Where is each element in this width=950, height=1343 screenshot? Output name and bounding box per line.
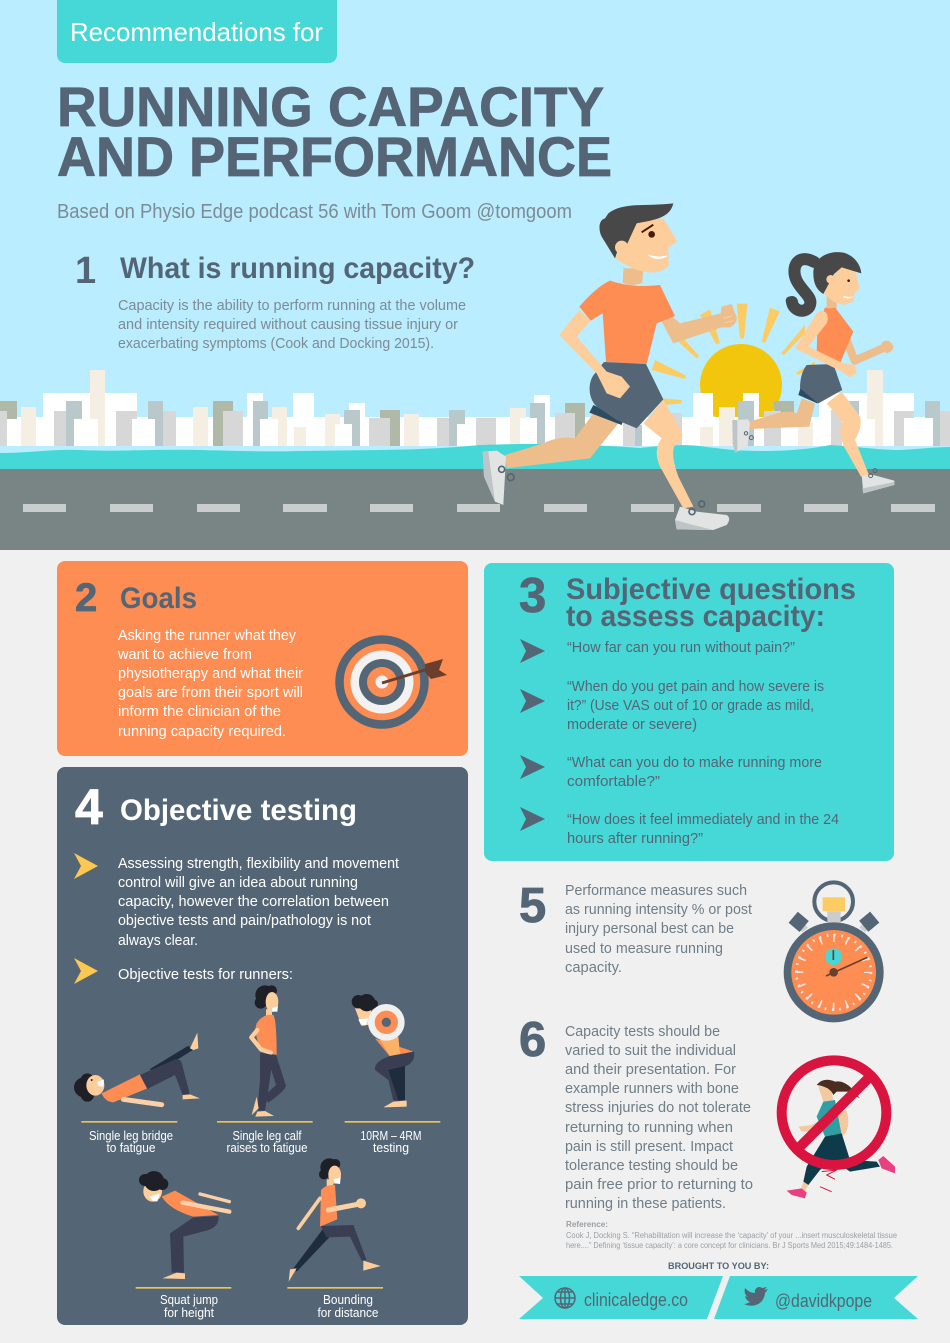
question list: “How does it feel immediately and in the 24 bbox=[567, 811, 839, 828]
figure: bounding bbox=[287, 1158, 383, 1320]
figure: 10RM to 4RM testing bbox=[345, 994, 440, 1155]
panel: hero sky background bbox=[0, 0, 950, 550]
reference: Reference: bbox=[566, 1220, 608, 1229]
panel: objective testing: 4 bbox=[75, 779, 103, 835]
section 1: what is running capacity: 1 bbox=[75, 250, 96, 292]
section 5: performance measures: capacity. bbox=[565, 959, 622, 976]
figure: 10RM to 4RM testing: 10RM – 4RM bbox=[360, 1129, 422, 1143]
title: AND PERFORMANCE bbox=[57, 125, 612, 188]
section 6: capacity tests: pain is still present. Impact bbox=[565, 1138, 734, 1155]
objective testing text bbox=[118, 855, 400, 983]
icon: bullet arrows bbox=[520, 639, 545, 831]
panel: subjective questions: to assess capacity: bbox=[566, 600, 825, 633]
panel: objective testing: Objective testing bbox=[120, 794, 357, 827]
section 5: performance measures: used to measure running bbox=[565, 940, 723, 957]
question list: it?” (Use VAS out of 10 or grade as mild, bbox=[567, 697, 814, 714]
section 5: performance measures: 5 bbox=[519, 879, 546, 933]
section 1: what is running capacity: exacerbating symptoms (Cook and Docking 2015). bbox=[118, 335, 434, 352]
figure: single leg calf raise: raises to fatigue bbox=[226, 1141, 308, 1155]
icon: stopwatch bbox=[784, 882, 884, 1022]
section 1: what is running capacity: What is running capacity? bbox=[120, 252, 475, 285]
figure: squat jump bbox=[136, 1171, 231, 1320]
section 6: capacity tests: returning to running when bbox=[565, 1119, 733, 1136]
question list: moderate or severe) bbox=[567, 716, 697, 733]
panel: subjective questions: 3 bbox=[519, 569, 546, 623]
figure: single leg calf raise: Single leg calf bbox=[232, 1129, 302, 1143]
section 6: capacity tests: and their presentation. For bbox=[565, 1061, 736, 1078]
icon: yellow chevrons bbox=[74, 853, 98, 984]
panel: goals: physiotherapy and what their bbox=[118, 665, 303, 682]
tag: recommendations for: Recommendations for bbox=[70, 17, 323, 47]
icon: globe bbox=[555, 1288, 575, 1308]
question list bbox=[567, 639, 839, 847]
section 6: capacity tests: example runners with bone bbox=[565, 1080, 739, 1097]
water band bbox=[0, 444, 950, 470]
icon: male runner bbox=[483, 203, 737, 530]
figure: single leg bridge: Single leg bridge bbox=[89, 1129, 173, 1143]
section 1: what is running capacity: and intensity required without causing tissue injury or bbox=[118, 316, 458, 333]
icon: target with arrow bbox=[340, 640, 447, 724]
question list: hours after running?” bbox=[567, 830, 703, 847]
reference: here....” Defining ‘tissue capacity’: a core concept for clinicians. Br J Sports Med 2015;49:1484-1485. bbox=[566, 1241, 893, 1250]
section 6: capacity tests: Capacity tests should be bbox=[565, 1023, 720, 1040]
section 6: capacity tests: pain free prior to returning to bbox=[565, 1176, 753, 1193]
objective testing text: Assessing strength, flexibility and movement bbox=[118, 855, 400, 872]
icon: twitter bird bbox=[744, 1287, 768, 1306]
figure: 10RM to 4RM testing: testing bbox=[373, 1141, 409, 1155]
question list: “How far can you run without pain?” bbox=[567, 639, 795, 656]
title bbox=[57, 75, 612, 188]
ribbon: twitter bbox=[714, 1276, 918, 1319]
objective testing text: always clear. bbox=[118, 932, 198, 949]
ribbon: twitter: @davidkpope bbox=[775, 1291, 872, 1311]
title: RUNNING CAPACITY bbox=[57, 75, 604, 138]
ribbon: website bbox=[519, 1276, 723, 1319]
figure: single leg bridge bbox=[74, 1033, 200, 1155]
panel: subjective questions bbox=[484, 563, 894, 861]
subtitle: Based on Physio Edge podcast 56 with Tom Goom @tomgoom bbox=[57, 201, 572, 223]
objective testing text: objective tests and pain/pathology is not bbox=[118, 912, 372, 929]
panel: goals: Goals bbox=[120, 582, 197, 615]
figure: single leg bridge: to fatigue bbox=[106, 1141, 156, 1155]
section 6: capacity tests: varied to suit the individual bbox=[565, 1042, 736, 1059]
question list: comfortable?” bbox=[567, 773, 660, 790]
tag: recommendations for bbox=[57, 0, 337, 63]
road with lane dashes bbox=[0, 469, 950, 550]
question list: “What can you do to make running more bbox=[567, 754, 822, 771]
panel: goals: want to achieve from bbox=[117, 646, 252, 663]
objective testing text: control will give an idea about running bbox=[118, 874, 358, 891]
icon: sun with rays bbox=[652, 304, 815, 426]
panel: goals bbox=[57, 561, 468, 756]
panel: goals: 2 bbox=[75, 576, 97, 620]
reference: Cook J, Docking S. “Rehabilitation will increase the ‘capacity’ of your ...insert musculoskeletal tissue bbox=[566, 1231, 898, 1240]
question list: “When do you get pain and how severe is bbox=[567, 678, 824, 695]
figure: squat jump: for height bbox=[164, 1306, 214, 1320]
panel: goals: inform the clinician of the bbox=[118, 703, 281, 720]
reference bbox=[566, 1220, 898, 1250]
section 5: performance measures: Performance measures such bbox=[565, 882, 747, 899]
objective testing text: Objective tests for runners: bbox=[118, 966, 293, 983]
panel: goals: Asking the runner what they bbox=[118, 627, 296, 644]
section 6: capacity tests: stress injuries do not tolerate bbox=[565, 1099, 751, 1116]
icon: no running sign bbox=[782, 1060, 895, 1198]
icon: woman runner bbox=[732, 252, 894, 493]
section 1: what is running capacity: Capacity is the ability to perform running at the volume bbox=[118, 297, 466, 314]
panel: objective testing bbox=[57, 767, 468, 1325]
figure: bounding: Bounding bbox=[323, 1293, 373, 1307]
figure: single leg calf raise bbox=[217, 985, 313, 1155]
panel: goals: goals are from their sport will bbox=[118, 684, 303, 701]
section 6: capacity tests bbox=[519, 1013, 753, 1212]
section 1: what is running capacity bbox=[75, 250, 475, 352]
objective testing text: capacity, however the correlation between bbox=[118, 893, 389, 910]
section 6: capacity tests: running in these patients. bbox=[565, 1195, 726, 1212]
section 5: performance measures bbox=[519, 879, 753, 976]
brought to you by label: BROUGHT TO YOU BY: bbox=[668, 1261, 769, 1271]
figure: squat jump: Squat jump bbox=[160, 1293, 218, 1307]
city skyline bbox=[0, 370, 950, 446]
panel: subjective questions: Subjective questions bbox=[566, 573, 856, 606]
figure: bounding: for distance bbox=[318, 1306, 379, 1320]
section 6: capacity tests: 6 bbox=[519, 1013, 546, 1067]
ribbon: website: clinicaledge.co bbox=[584, 1290, 688, 1310]
section 5: performance measures: as running intensity % or post bbox=[565, 901, 753, 918]
panel: goals: running capacity required. bbox=[118, 723, 286, 740]
section 6: capacity tests: tolerance testing should be bbox=[565, 1157, 738, 1174]
section 5: performance measures: injury personal best can be bbox=[565, 920, 734, 937]
